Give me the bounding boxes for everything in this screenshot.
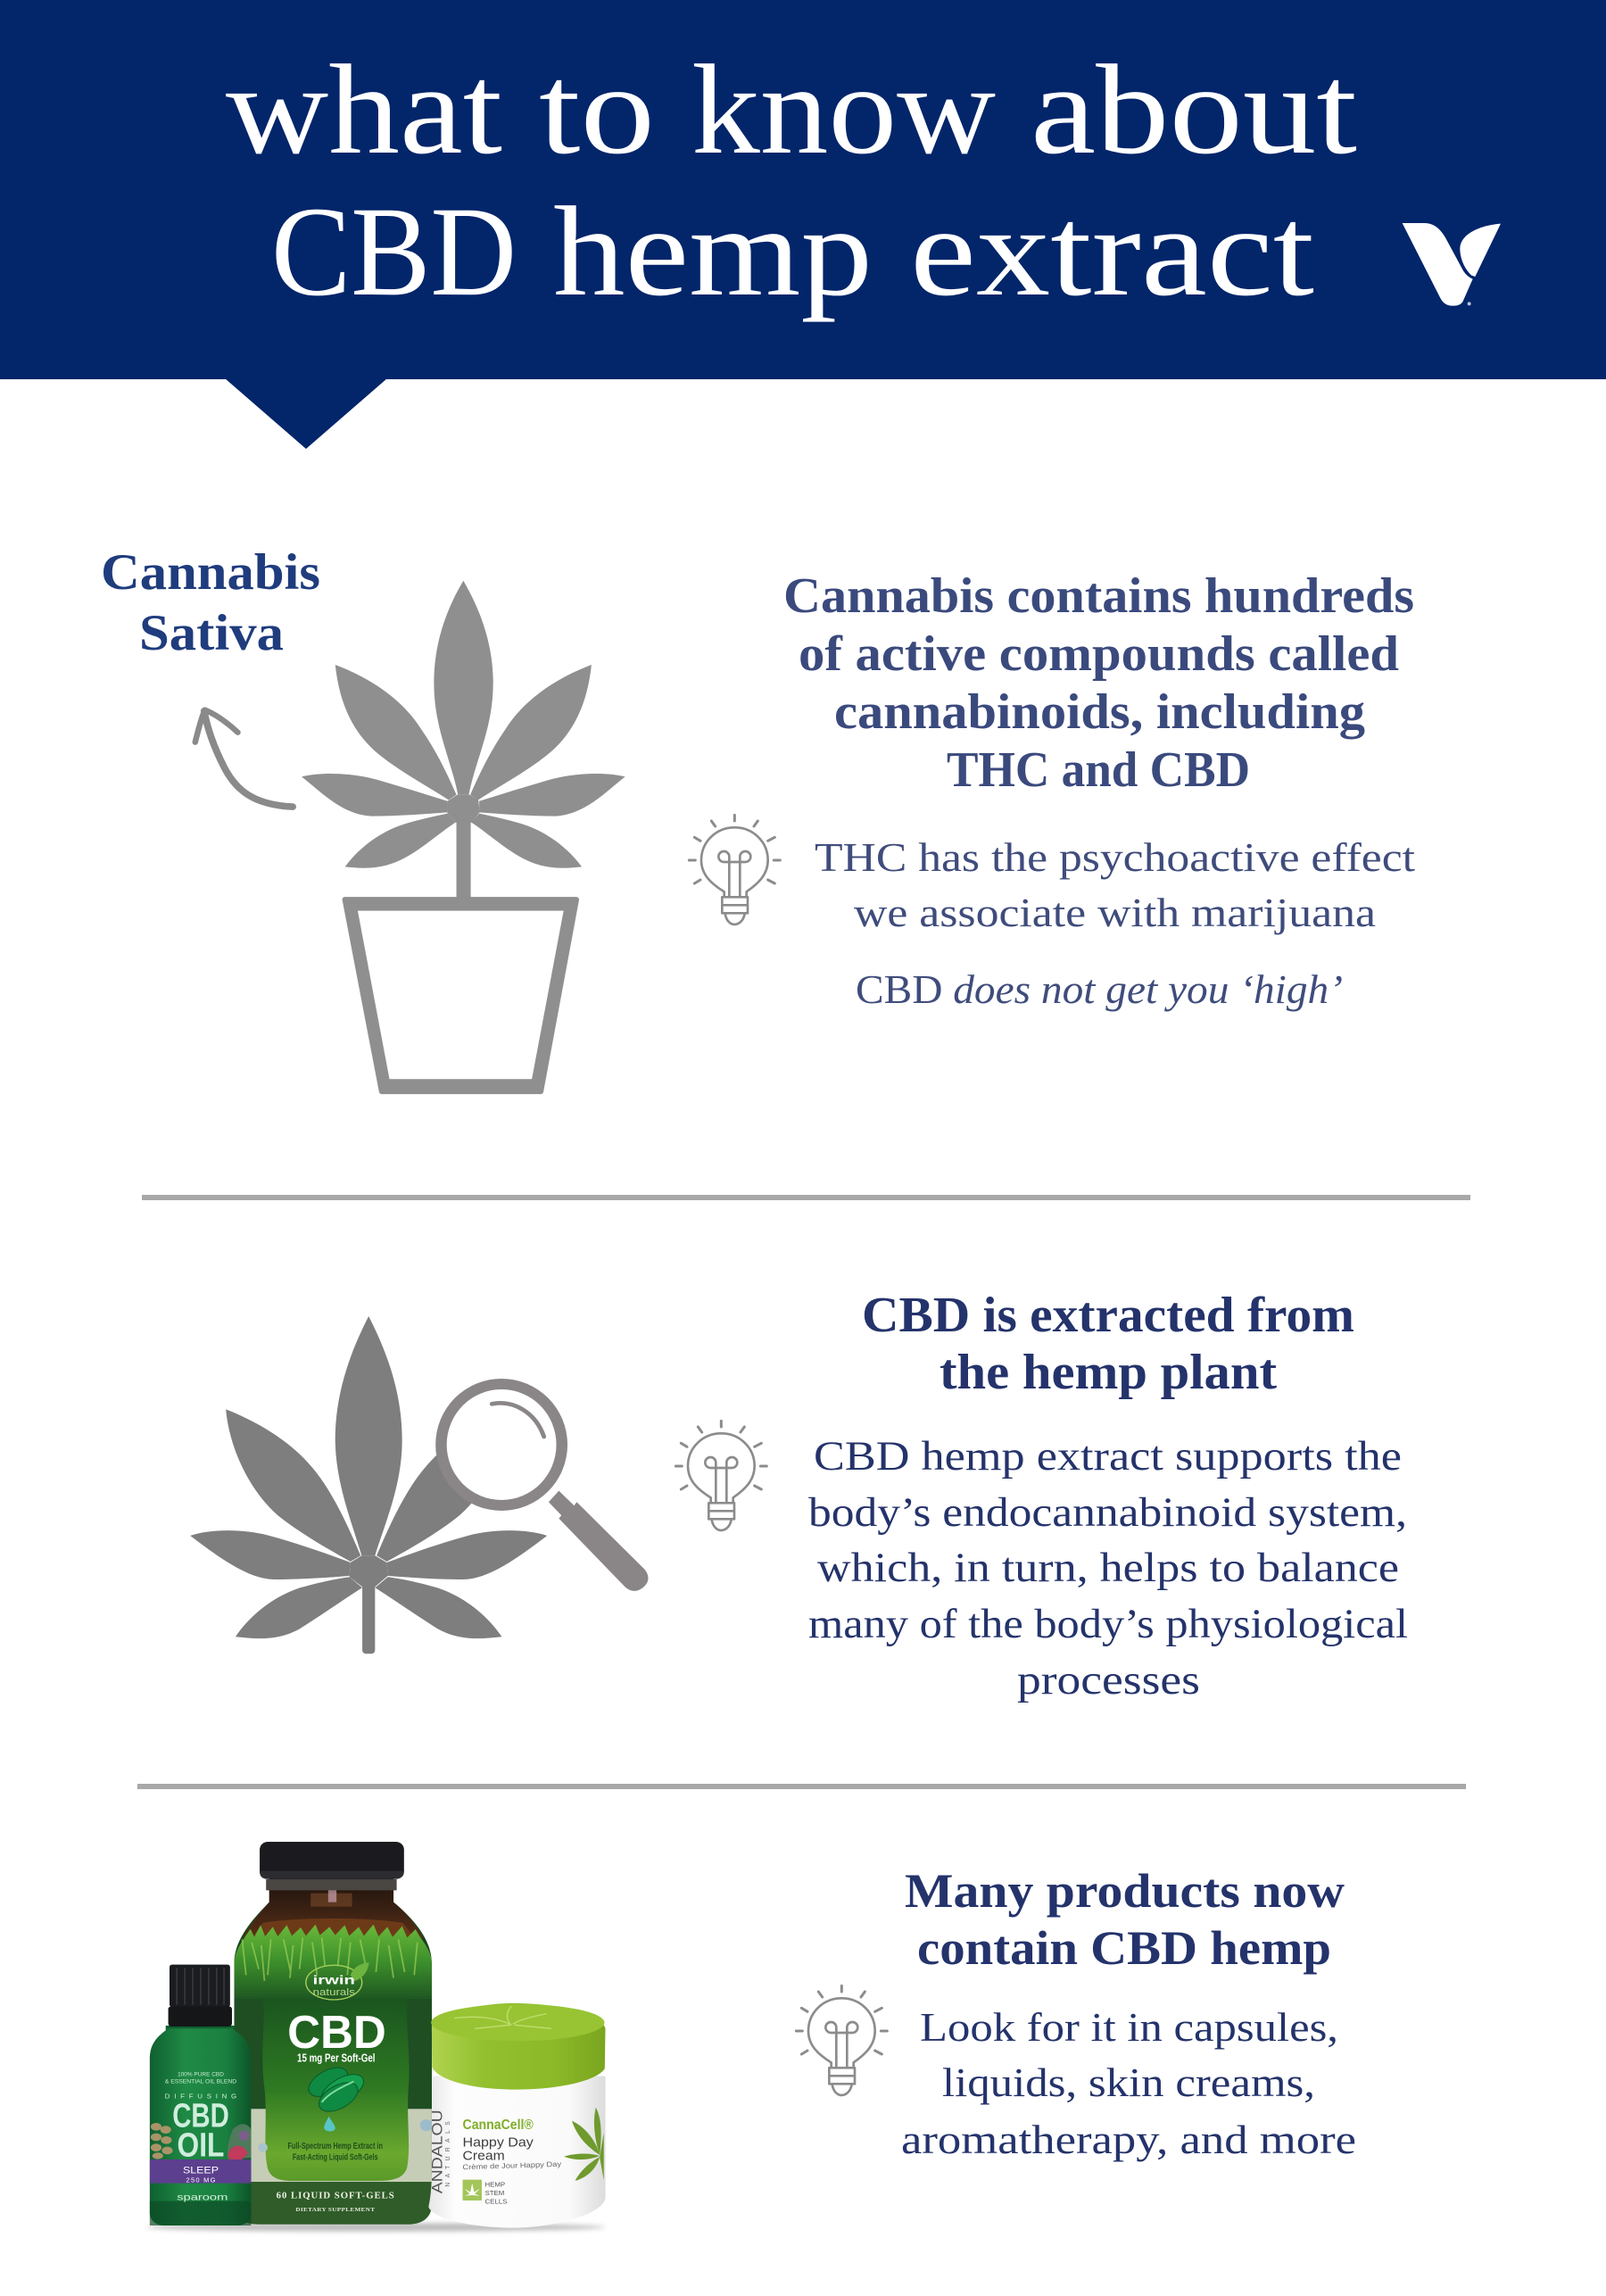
title: extract: [910, 181, 1314, 323]
text: product forms: Look for it in capsules,: [920, 2004, 1338, 2050]
header banner: [0, 0, 1606, 449]
jar label text: Crème de Jour Happy Day: [462, 2160, 562, 2171]
panel: hemp extraction text: [675, 1288, 1408, 1703]
hemp leaf: [190, 1316, 547, 1654]
icon: light bulb 2: [675, 1421, 766, 1530]
jar label text: STEM: [485, 2189, 504, 2197]
text: THC effect: THC has the psychoactive effect: [815, 834, 1415, 880]
heading: cannabis compounds: cannabinoids, including: [834, 684, 1365, 740]
heading: cannabis compounds: of active compounds called: [799, 626, 1399, 682]
bottle brand text: irwin: [313, 1974, 355, 1987]
bottle brand text: [277, 1974, 394, 2213]
text: endocannabinoid body: many of the body’s physiological: [808, 1601, 1408, 1647]
image: CBD products: [146, 1842, 606, 2232]
title: about: [1031, 39, 1357, 181]
jar label text: ANDALOU: [430, 2110, 446, 2193]
oil label text: CBD: [172, 2097, 229, 2134]
magnifying glass: [435, 1379, 648, 1591]
text: CBD not high: CBD does not get you ‘high’: [856, 966, 1343, 1012]
jar label text: HEMP: [485, 2181, 505, 2189]
jar label text: Happy Day: [463, 2135, 534, 2150]
icon: hemp leaf with magnifying glass: [190, 1316, 648, 1654]
text: endocannabinoid body: CBD hemp extract supports the: [814, 1433, 1402, 1480]
arrow: curved pointer to label: [195, 710, 293, 807]
bottle brand text: 60 LIQUID SOFT-GELS: [277, 2192, 394, 2201]
oil label text: DIFFUSING: [165, 2093, 236, 2101]
heading: cannabis compounds: [783, 568, 1414, 798]
icon: potted cannabis plant: [302, 581, 625, 1091]
oil label text: [165, 2072, 236, 2202]
label: Cannabis Sativa: Sativa: [139, 605, 284, 661]
jar label text: NATURALS: [445, 2121, 451, 2187]
text: endocannabinoid body: processes: [1017, 1657, 1200, 1703]
jar label text: Cream: [463, 2149, 505, 2163]
heading: CBD extracted: [862, 1288, 1354, 1400]
panel: products text: [796, 1864, 1356, 2162]
jar label text: [430, 2110, 562, 2205]
icon: light bulb 3: [796, 1985, 887, 2095]
label: Cannabis Sativa: Cannabis: [101, 544, 320, 601]
heading: many products: contain CBD hemp: [917, 1921, 1331, 1975]
title: to: [539, 39, 655, 181]
bottle brand text: naturals: [313, 1986, 355, 1998]
heading: many products: Many products now: [905, 1864, 1345, 1918]
product: CBD oil dropper bottle: [150, 1965, 251, 2226]
bottle brand text: Full-Spectrum Hemp Extract in: [287, 2142, 383, 2151]
text: endocannabinoid body: body’s endocannabinoid system,: [808, 1489, 1407, 1536]
heading: cannabis compounds: THC and CBD: [947, 742, 1250, 798]
jar label text: CELLS: [485, 2198, 507, 2205]
title: [226, 39, 1357, 323]
seeds and flowers: [151, 2123, 173, 2159]
oil label text: OIL: [178, 2126, 224, 2164]
oil label text: & ESSENTIAL OIL BLEND: [165, 2079, 236, 2085]
jar leaf graphic: [564, 2108, 604, 2181]
text: product forms: aromatherapy, and more: [901, 2117, 1356, 2162]
soft-gel capsules: [303, 2062, 369, 2118]
oil label text: 100% PURE CBD: [178, 2072, 224, 2078]
bottle brand text: CBD: [287, 2008, 386, 2059]
icon: V logo: [1403, 223, 1501, 306]
heading: CBD extracted: the hemp plant: [940, 1345, 1277, 1400]
bottle brand text: 15 mg Per Soft-Gel: [297, 2051, 376, 2065]
text: product forms: liquids, skin creams,: [942, 2060, 1315, 2105]
bottle brand text: DIETARY SUPPLEMENT: [295, 2207, 375, 2213]
panel: cannabinoids text: [689, 568, 1415, 1012]
title: know: [691, 39, 996, 181]
title: hemp: [553, 181, 873, 323]
heading: many products: [905, 1864, 1345, 1975]
text: endocannabinoid body: which, in turn, helps to balance: [817, 1545, 1399, 1591]
text: endocannabinoid body: [808, 1433, 1408, 1703]
bottle brand text: Fast-Acting Liquid Soft-Gels: [293, 2153, 378, 2163]
oil label text: sparoom: [177, 2193, 228, 2202]
icon: light bulb 1: [689, 815, 780, 924]
heading: cannabis compounds: Cannabis contains hundreds: [783, 568, 1414, 624]
title: what: [226, 39, 502, 181]
product: CannaCell cream jar: [428, 2003, 606, 2228]
text: THC effect: we associate with marijuana: [854, 890, 1376, 935]
heading: CBD extracted: CBD is extracted from: [862, 1288, 1354, 1343]
jar label text: CannaCell®: [463, 2118, 534, 2133]
product: irwin naturals CBD bottle: [234, 1842, 433, 2225]
text: THC effect: [815, 834, 1415, 935]
title: CBD: [271, 181, 517, 323]
oil label text: 250 MG: [186, 2176, 216, 2184]
label: Cannabis Sativa: [101, 544, 320, 661]
text: product forms: [901, 2004, 1356, 2162]
oil label text: SLEEP: [183, 2166, 219, 2176]
